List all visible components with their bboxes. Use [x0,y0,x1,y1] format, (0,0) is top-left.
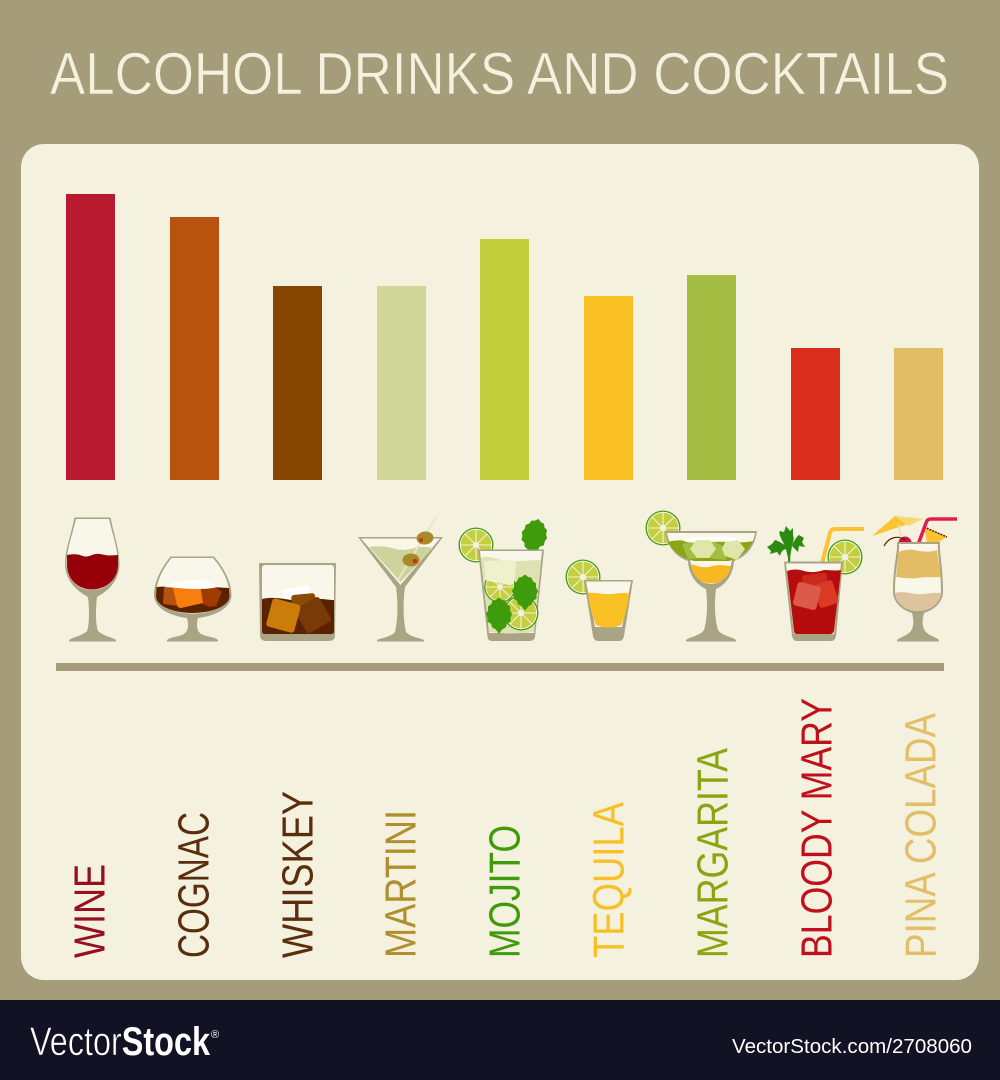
label: mojito: MOJITO [480,825,530,958]
icon: tequila shot [566,560,633,641]
bar: whiskey [273,286,322,480]
divider shelf [56,663,944,671]
footer bar [0,1000,1000,1080]
label: whiskey: WHISKEY [274,791,322,958]
icon: martini glass [358,517,443,642]
straw [915,519,957,553]
bar: bloody mary [791,348,840,480]
bar: mojito [480,239,529,480]
icon: wine glass [65,518,120,642]
bar: margarita [687,275,736,480]
label: bloody mary: BLOODY MARY [792,698,842,958]
bar: cognac [170,217,219,480]
footer logo: VectorStock [30,1020,211,1064]
celery leaf [767,526,805,565]
bar: pina colada [894,348,943,480]
pineapple slice [924,527,947,548]
label: wine: WINE [66,864,114,958]
label: pina colada: PINA COLADA [896,712,946,958]
footer registered mark: ® [211,1029,219,1041]
label: martini: MARTINI [376,810,426,958]
icon: margarita glass [646,510,757,642]
panel: chart card [21,144,979,980]
icon: whiskey glass [259,563,336,641]
label: margarita: MARGARITA [688,747,738,958]
footer id: VectorStock.com/2708060 [732,1036,972,1058]
label: cognac: COGNAC [170,812,218,958]
bar chart [66,194,943,480]
icon: pina colada glass [872,516,957,642]
bar: martini [377,286,426,480]
icon: cognac glass [154,556,232,642]
vertical labels [66,698,946,958]
umbrella [872,516,923,536]
straw [820,529,864,571]
icon: bloody mary glass [767,526,864,641]
cherry [898,536,912,550]
bar: wine [66,194,115,480]
icon: mojito glass [458,517,550,641]
label: tequila: TEQUILA [584,801,634,958]
bar: tequila [584,296,633,480]
